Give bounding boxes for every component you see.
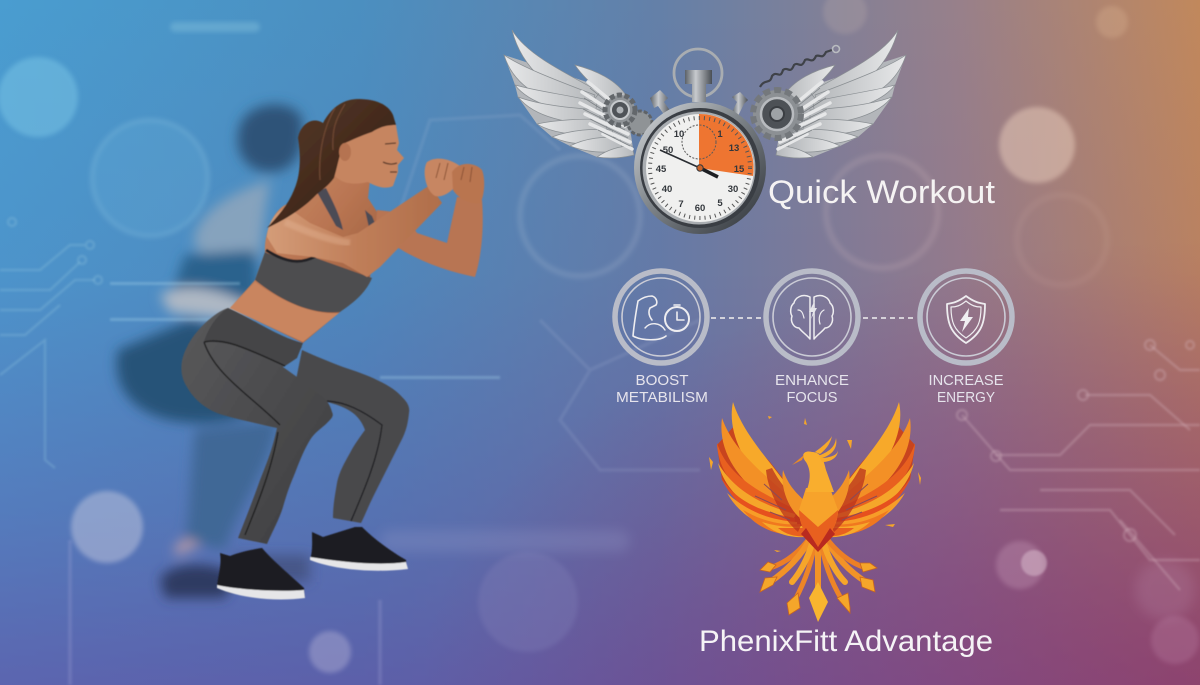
label: ENHANCE <box>775 372 849 389</box>
ear <box>339 143 351 161</box>
benefit: boost metabolism: METABILISM <box>616 389 708 406</box>
dial numbers: 1 <box>717 129 723 140</box>
midriff shading <box>230 282 339 342</box>
dial numbers: 13 <box>729 143 739 154</box>
body <box>799 488 838 547</box>
dial numbers: 60 <box>695 203 705 214</box>
dial numbers: 50 <box>663 145 673 156</box>
crest <box>815 436 838 462</box>
connector dashes <box>711 317 916 319</box>
heading: Quick Workout: Quick Workout <box>768 174 995 210</box>
dial face <box>646 114 754 222</box>
stopwatch with wings <box>504 30 906 234</box>
phoenix logo <box>709 402 921 622</box>
hair and ponytail <box>267 99 396 228</box>
crown stem <box>685 70 712 102</box>
leggings seams <box>204 341 285 535</box>
torso and neck <box>230 160 377 343</box>
sports top <box>255 252 372 312</box>
near shoe <box>217 548 305 598</box>
athlete squatting <box>181 99 484 600</box>
straps <box>317 188 377 232</box>
crown ring <box>674 49 722 97</box>
near leg and hips <box>181 308 333 544</box>
left gears <box>605 95 652 135</box>
benefit: increase energy <box>920 271 1012 406</box>
dial numbers <box>656 129 745 214</box>
watch hands <box>660 150 700 168</box>
dial numbers: 40 <box>662 184 672 195</box>
far leg <box>295 350 409 523</box>
fists <box>425 159 460 196</box>
footer heading: PhenixFitt Advantage: PhenixFitt Advantage <box>699 625 993 658</box>
motion streaks <box>110 282 500 379</box>
spring <box>760 50 832 87</box>
side pushers <box>650 90 748 116</box>
circuit lines right <box>957 340 1200 590</box>
head and face <box>332 121 404 188</box>
benefit: boost metabolism <box>615 271 708 406</box>
right wing <box>824 402 915 537</box>
orange wedge <box>699 114 754 176</box>
tail feathers <box>770 535 866 600</box>
left wing <box>717 402 808 537</box>
icon: brain <box>766 271 858 363</box>
spring eyelet <box>832 46 840 52</box>
watch case <box>634 102 766 234</box>
label: BOOST <box>636 372 688 389</box>
motion ghost of athlete <box>117 104 310 598</box>
tail tips <box>760 562 877 622</box>
right wing <box>776 30 906 158</box>
far arm <box>372 197 483 277</box>
right gear <box>753 90 801 138</box>
icon: arm and stopwatch <box>615 271 707 363</box>
dial numbers: 10 <box>674 129 684 140</box>
far shoe <box>310 527 407 568</box>
dial numbers: 45 <box>656 164 667 175</box>
circuit lines left <box>0 218 102 468</box>
dial ticks <box>650 118 750 218</box>
shoulders <box>782 470 850 518</box>
sub dial <box>682 125 716 159</box>
embers <box>709 416 921 552</box>
benefit: enhance focus <box>766 271 858 406</box>
dial numbers: 15 <box>734 164 745 175</box>
left wing <box>504 30 634 158</box>
dial numbers: 7 <box>678 199 684 210</box>
benefit: increase energy: ENERGY <box>937 389 995 406</box>
label: INCREASE <box>928 372 1004 389</box>
dial numbers: 30 <box>728 184 738 195</box>
waistband <box>204 308 303 366</box>
benefit: enhance focus: FOCUS <box>786 389 838 406</box>
dial numbers: 5 <box>717 198 723 209</box>
neck and head <box>803 452 834 492</box>
icon: shield with bolt <box>920 271 1012 363</box>
near arm <box>267 185 442 277</box>
